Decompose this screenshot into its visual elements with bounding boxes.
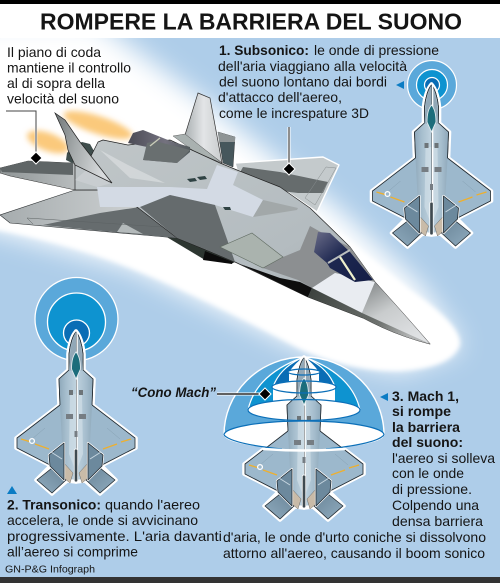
fuselage highlight bbox=[100, 150, 165, 183]
text: 1. Subsonico: del suono lontano dai bordi bbox=[219, 74, 387, 90]
fuselage body bbox=[75, 140, 430, 344]
arrow: Mach 1 marker bbox=[380, 393, 388, 401]
text: 3. Mach 1: d'aria, le onde d'urto coniche si dissolvono bbox=[223, 529, 486, 545]
label: Cono Mach: “Cono Mach” bbox=[131, 384, 216, 400]
pale nose panel bbox=[312, 273, 375, 313]
text: 3. Mach 1: 3. Mach 1, bbox=[392, 388, 459, 404]
text: 2. Transonico: 2. Transonico: bbox=[7, 496, 101, 512]
credit: GN-P&G Infograph bbox=[5, 564, 95, 576]
text: 3. Mach 1: Colpendo una bbox=[392, 497, 479, 513]
arrow: subsonic marker bbox=[396, 81, 404, 89]
text: 1. Subsonico: dell'aria viaggiano alla velocità bbox=[218, 58, 407, 74]
text: 3. Mach 1: si rompe bbox=[392, 403, 451, 419]
text: 3. Mach 1 bbox=[223, 388, 495, 561]
engine glow bbox=[24, 105, 135, 158]
callout leader: subsonic bbox=[283, 127, 295, 175]
cockpit canopy bbox=[314, 232, 373, 282]
text: 3. Mach 1: l'aereo si solleva bbox=[392, 450, 495, 466]
text: tail plane bbox=[7, 44, 131, 106]
Mach cone dome bbox=[224, 357, 384, 449]
dark fin root bbox=[66, 142, 112, 183]
black lower strip bbox=[240, 264, 312, 297]
text: 2. Transonico: accelera, le onde si avvicinano bbox=[7, 512, 198, 528]
arrow: transonic marker bbox=[7, 486, 17, 494]
plane: transonic bbox=[16, 331, 136, 494]
text: 3. Mach 1: con le onde bbox=[392, 465, 464, 481]
camouflage mid patch bbox=[253, 200, 298, 217]
engine nacelle bbox=[128, 130, 190, 163]
text: 3. Mach 1: attorno all'aereo, causando il boom sonico bbox=[223, 545, 485, 561]
text: 3. Mach 1: densa barriera bbox=[392, 513, 483, 529]
main jet illustration bbox=[0, 93, 430, 344]
text: 2. Transonico: quando l'aereo bbox=[105, 496, 200, 512]
cockpit surround bbox=[263, 226, 375, 288]
Mach cone rings bbox=[224, 369, 384, 450]
camouflage dark patch bbox=[140, 195, 235, 262]
text: 2. Transonico: progressivamente. L'aria davanti bbox=[7, 528, 222, 544]
text: 1. Subsonico: 1. Subsonico: bbox=[219, 42, 309, 58]
under fuselage bbox=[165, 236, 235, 263]
far tail plane bbox=[0, 161, 100, 190]
text: 1. Subsonico: le onde di pressione bbox=[314, 42, 439, 58]
pressure rings: subsonic bbox=[408, 60, 456, 110]
callout leader: tail plane bbox=[6, 111, 42, 164]
text: 1. Subsonico: d'attacco dell'aereo, bbox=[218, 89, 342, 105]
far vertical fin backing bbox=[218, 132, 235, 167]
camouflage light patch bbox=[97, 165, 263, 217]
nose cone bbox=[362, 282, 430, 344]
text: 3. Mach 1: la barriera bbox=[392, 419, 460, 435]
text: tail plane: velocità del suono bbox=[7, 90, 119, 106]
text: 2. Transonico: all’aereo si comprime bbox=[7, 544, 138, 560]
pressure rings: transonic bbox=[35, 278, 118, 360]
plane: Mach 1 bbox=[244, 357, 364, 520]
near wing bbox=[0, 190, 177, 238]
left vertical fin bbox=[55, 113, 112, 183]
callout leader: Mach cone bbox=[217, 388, 271, 400]
right vertical fin bbox=[185, 93, 222, 163]
bottom rule bbox=[0, 577, 500, 583]
access panel bbox=[220, 233, 283, 268]
text: 1. Subsonico: come le increspature 3D bbox=[219, 105, 369, 121]
text: 2. Transonico bbox=[7, 496, 222, 560]
nose underside bbox=[308, 288, 430, 344]
text: tail plane: Il piano di coda bbox=[7, 44, 101, 60]
title: ROMPERE LA BARRIERA DEL SUONO bbox=[40, 8, 462, 34]
text: 1. Subsonico bbox=[218, 42, 439, 121]
text: tail plane: mantiene il controllo bbox=[7, 60, 131, 76]
text: tail plane: al di sopra della bbox=[7, 75, 105, 91]
white shock wave behind jet bbox=[0, 20, 460, 372]
far wing bbox=[235, 157, 339, 212]
plane: subsonic bbox=[372, 84, 492, 247]
text: 3. Mach 1: del suono: bbox=[392, 434, 463, 450]
small panel marks bbox=[187, 176, 231, 210]
top black rule bbox=[0, 0, 500, 4]
text: 3. Mach 1: di pressione. bbox=[392, 481, 472, 497]
